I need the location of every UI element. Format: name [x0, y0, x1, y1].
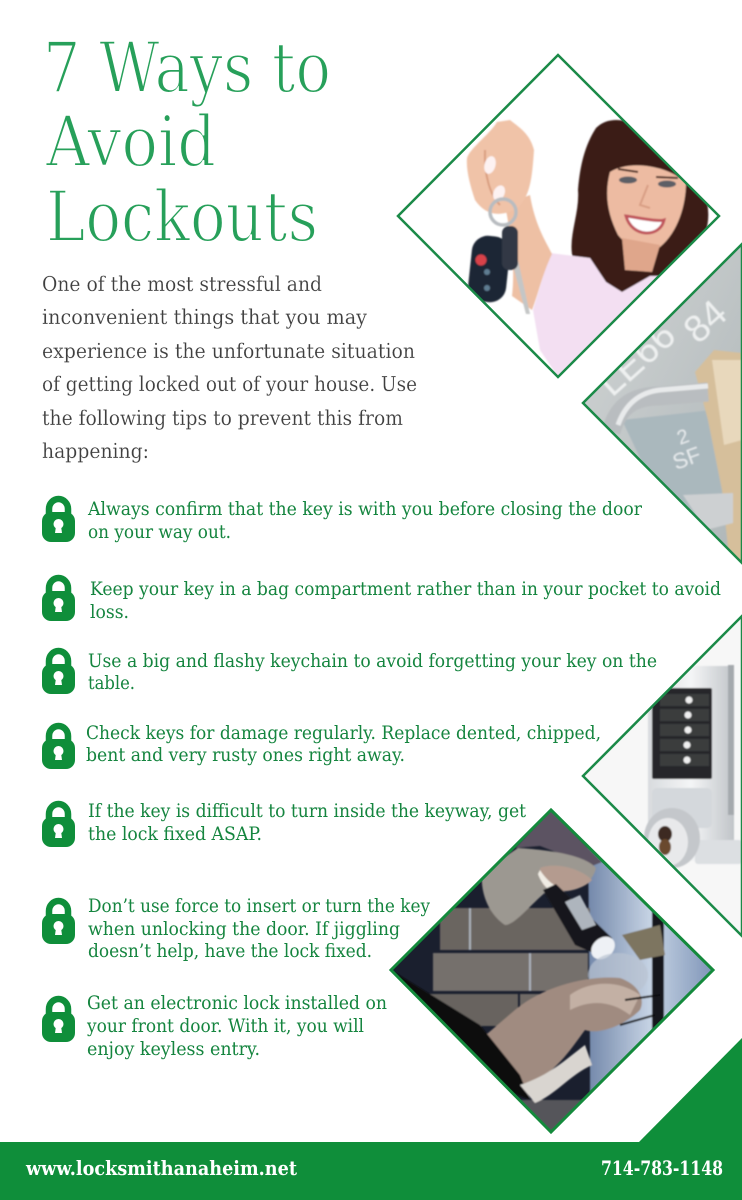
- eyes: [619, 176, 637, 184]
- keypad: [652, 688, 712, 779]
- tip 5: the lock fixed ASAP.: [88, 824, 262, 845]
- head covering: [515, 810, 602, 866]
- key fob: [467, 234, 511, 304]
- tip 4: [42, 723, 601, 769]
- title: 7 Ways to: [43, 27, 331, 109]
- icon: padlock: [42, 999, 75, 1042]
- lower plate: [652, 788, 712, 828]
- tip 6: Don’t use force to insert or turn the key: [88, 896, 430, 917]
- title: Lockouts: [46, 176, 318, 258]
- door frame: [588, 848, 711, 1092]
- intro text: the following tips to prevent this from: [42, 406, 403, 430]
- tip 5: If the key is difficult to turn inside the keyway, get: [88, 801, 527, 822]
- intro text: experience is the unfortunate situation: [42, 339, 415, 363]
- tip 3: table.: [88, 673, 135, 694]
- face: [607, 165, 686, 251]
- lever: [695, 840, 742, 864]
- tip 2: loss.: [90, 602, 129, 623]
- icon: padlock: [42, 901, 75, 944]
- embossed numbers: 84: [676, 292, 735, 352]
- hands: [477, 977, 642, 1086]
- hair: [572, 120, 708, 300]
- website: www.locksmithanaheim.net: [25, 1156, 298, 1180]
- icon: padlock: [42, 804, 75, 847]
- flashlight: [543, 884, 612, 956]
- tip 7: Get an electronic lock installed on: [87, 993, 387, 1014]
- key ring: [490, 199, 516, 225]
- knob: [644, 808, 700, 868]
- title: [43, 27, 331, 258]
- photo panel: burglar picking lock: [391, 810, 713, 1132]
- tip 6: when unlocking the door. If jiggling: [88, 919, 400, 940]
- face and hood: [482, 848, 596, 925]
- icon: padlock: [42, 499, 75, 542]
- eyebrows: [618, 169, 678, 178]
- shackle: [611, 392, 708, 432]
- padlock body: [695, 350, 742, 563]
- tip 4: bent and very rusty ones right away.: [86, 745, 405, 766]
- photo panel: padlock on credit card: 2: [674, 425, 692, 450]
- hand: [467, 120, 534, 214]
- tip 4: Check keys for damage regularly. Replace dented, chipped,: [86, 723, 601, 744]
- door handle: [622, 925, 665, 960]
- icon: padlock: [42, 726, 75, 769]
- bricks: [440, 908, 590, 950]
- icon: padlock: [42, 651, 75, 694]
- photo panel: padlock on credit card: SF: [669, 442, 704, 475]
- tip 7: [42, 993, 387, 1060]
- tip 3: Use a big and flashy keychain to avoid forgetting your key on the: [88, 651, 657, 672]
- tip 7: your front door. With it, you will: [86, 1016, 364, 1037]
- lock pick: [620, 995, 660, 1025]
- fingernails: [483, 156, 497, 175]
- tip 3: [42, 651, 657, 694]
- icon: padlock: [42, 578, 75, 621]
- tip 2: [42, 578, 721, 623]
- intro text: One of the most stressful and: [42, 272, 322, 296]
- sleeve: [391, 970, 530, 1100]
- light glow: [587, 953, 648, 984]
- nose shadow: [640, 185, 650, 208]
- tip 6: doesn’t help, have the lock fixed.: [88, 941, 372, 962]
- footer bar: [0, 1142, 742, 1200]
- arm: [505, 195, 552, 310]
- tip 1: Always confirm that the key is with you before closing the door: [87, 499, 642, 520]
- neck: [622, 238, 660, 272]
- photo panel: keypad door lock: [583, 616, 742, 936]
- photo panel: padlock on credit card: LE66: [590, 314, 684, 405]
- lock plate: [648, 666, 734, 861]
- lower card area: [624, 411, 721, 512]
- cuff: [520, 1045, 592, 1103]
- tip 1: on your way out.: [88, 522, 231, 543]
- intro text: [42, 272, 417, 463]
- intro text: inconvenient things that you may: [42, 305, 367, 329]
- tip 1: [42, 499, 642, 543]
- green corner triangle: [638, 1038, 742, 1143]
- tip 7: enjoy keyless entry.: [87, 1039, 260, 1060]
- tip 6: [42, 896, 430, 962]
- intro text: of getting locked out of your house. Use: [42, 372, 417, 396]
- intro text: happening:: [42, 439, 149, 463]
- title: Avoid: [45, 101, 216, 183]
- tip 5: [42, 801, 527, 847]
- photo panel: padlock on credit card: [583, 244, 742, 563]
- shirt: [533, 253, 660, 377]
- keyhole: [658, 826, 672, 842]
- finger shadow: [485, 150, 500, 205]
- photo panel: woman holding car keys: [398, 55, 720, 377]
- keypad buttons: [686, 696, 692, 704]
- key shaft: [512, 260, 530, 314]
- mouth: [626, 216, 664, 233]
